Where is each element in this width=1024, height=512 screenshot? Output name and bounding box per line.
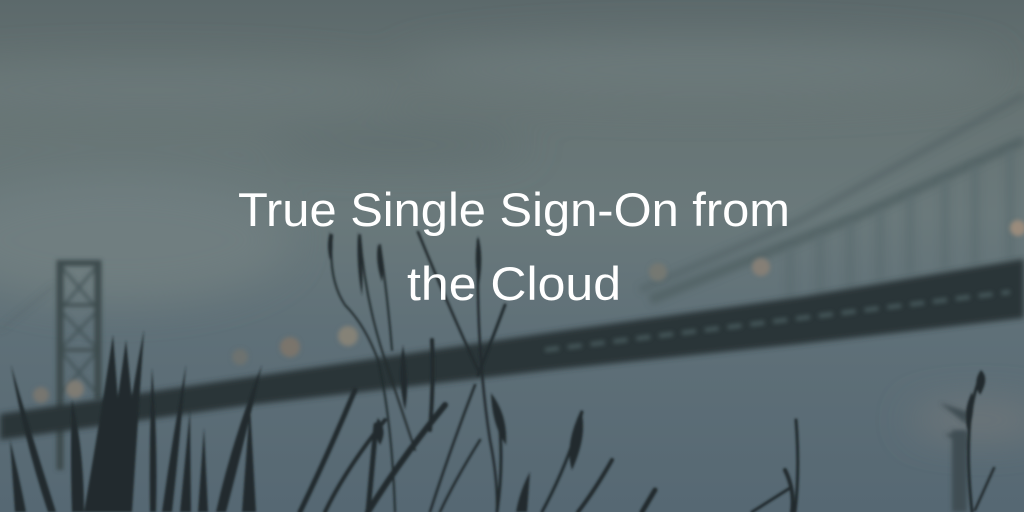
- deck lights: [545, 292, 1010, 350]
- middle grass clump: [300, 232, 505, 512]
- grass seed heads: [328, 232, 530, 512]
- bridge cables: [0, 95, 1024, 330]
- distant lamp post: [940, 403, 968, 512]
- right grass stems: [542, 378, 994, 512]
- title: [238, 183, 790, 310]
- foreground grass: [10, 232, 994, 512]
- left grass clump: [10, 330, 262, 512]
- bridge deck: [0, 259, 1024, 440]
- bridge tower: [57, 260, 101, 470]
- title line 1: True Single Sign-On from: [238, 183, 790, 236]
- suspension bridge: [0, 95, 1024, 470]
- title line 2: the Cloud: [407, 257, 621, 310]
- bokeh lights: [33, 220, 1024, 403]
- bridge hangers: [790, 150, 1010, 300]
